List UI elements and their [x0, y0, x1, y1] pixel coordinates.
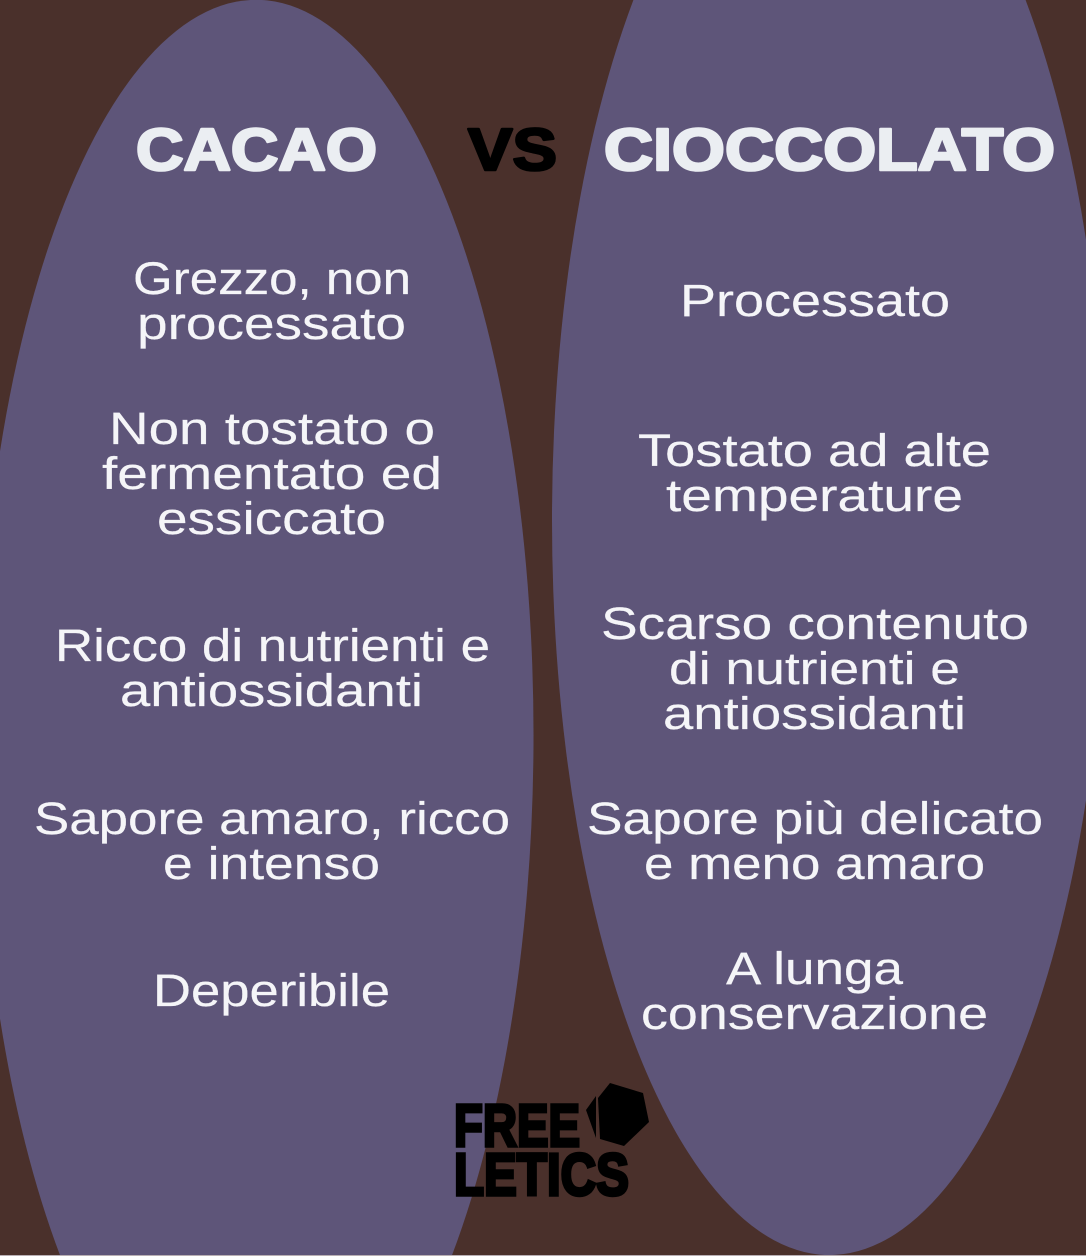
text block: cioccolato tostato: temperature	[666, 470, 963, 521]
text block: cacao sapore	[34, 793, 510, 889]
text block: cacao grezzo	[133, 253, 411, 349]
text block: cioccolato processato: Processato	[680, 275, 950, 326]
icon: pentagon mark	[586, 1083, 649, 1146]
text block: cioccolato tostato	[638, 425, 991, 521]
text block: cacao nutrienti	[55, 620, 490, 716]
heading: VS: VS	[468, 117, 557, 183]
text block: cacao grezzo: processato	[137, 298, 406, 349]
text block: cioccolato conservazione: A lunga	[726, 943, 904, 994]
text block: cacao sapore: e intenso	[163, 838, 380, 889]
logo: Freeletics: LETICS	[454, 1142, 629, 1208]
heading: CACAO: CACAO	[136, 117, 377, 183]
text block: cioccolato sapore	[587, 793, 1043, 889]
panel: cacao ellipse	[0, 0, 534, 1256]
text block: cacao non tostato: essiccato	[157, 493, 386, 544]
text block: cioccolato nutrienti: di nutrienti e	[669, 643, 960, 694]
text block: cacao non tostato: fermentato ed	[102, 448, 442, 499]
text block: cacao deperibile: Deperibile	[153, 965, 390, 1016]
text block: cacao grezzo: Grezzo, non	[133, 253, 411, 304]
text block: cioccolato nutrienti	[601, 598, 1029, 739]
text block: cioccolato tostato: Tostato ad alte	[638, 425, 991, 476]
logo: Freeletics: FREE	[454, 1093, 580, 1159]
text block: cioccolato sapore: e meno amaro	[644, 838, 985, 889]
text block: cioccolato conservazione: conservazione	[641, 988, 988, 1039]
logo: Freeletics	[454, 1083, 649, 1208]
panel: cioccolato ellipse	[552, 0, 1086, 1255]
text block: cacao sapore: Sapore amaro, ricco	[34, 793, 510, 844]
text block: cioccolato nutrienti: antiossidanti	[663, 688, 966, 739]
text block: cioccolato conservazione	[641, 943, 988, 1039]
heading: CIOCCOLATO: CIOCCOLATO	[604, 117, 1055, 183]
text block: cioccolato sapore: Sapore più delicato	[587, 793, 1043, 844]
text block: cacao non tostato	[102, 403, 442, 544]
text block: cioccolato nutrienti: Scarso contenuto	[601, 598, 1029, 649]
text block: cacao non tostato: Non tostato o	[109, 403, 435, 454]
text block: cacao nutrienti: Ricco di nutrienti e	[55, 620, 490, 671]
text block: cacao nutrienti: antiossidanti	[120, 665, 423, 716]
